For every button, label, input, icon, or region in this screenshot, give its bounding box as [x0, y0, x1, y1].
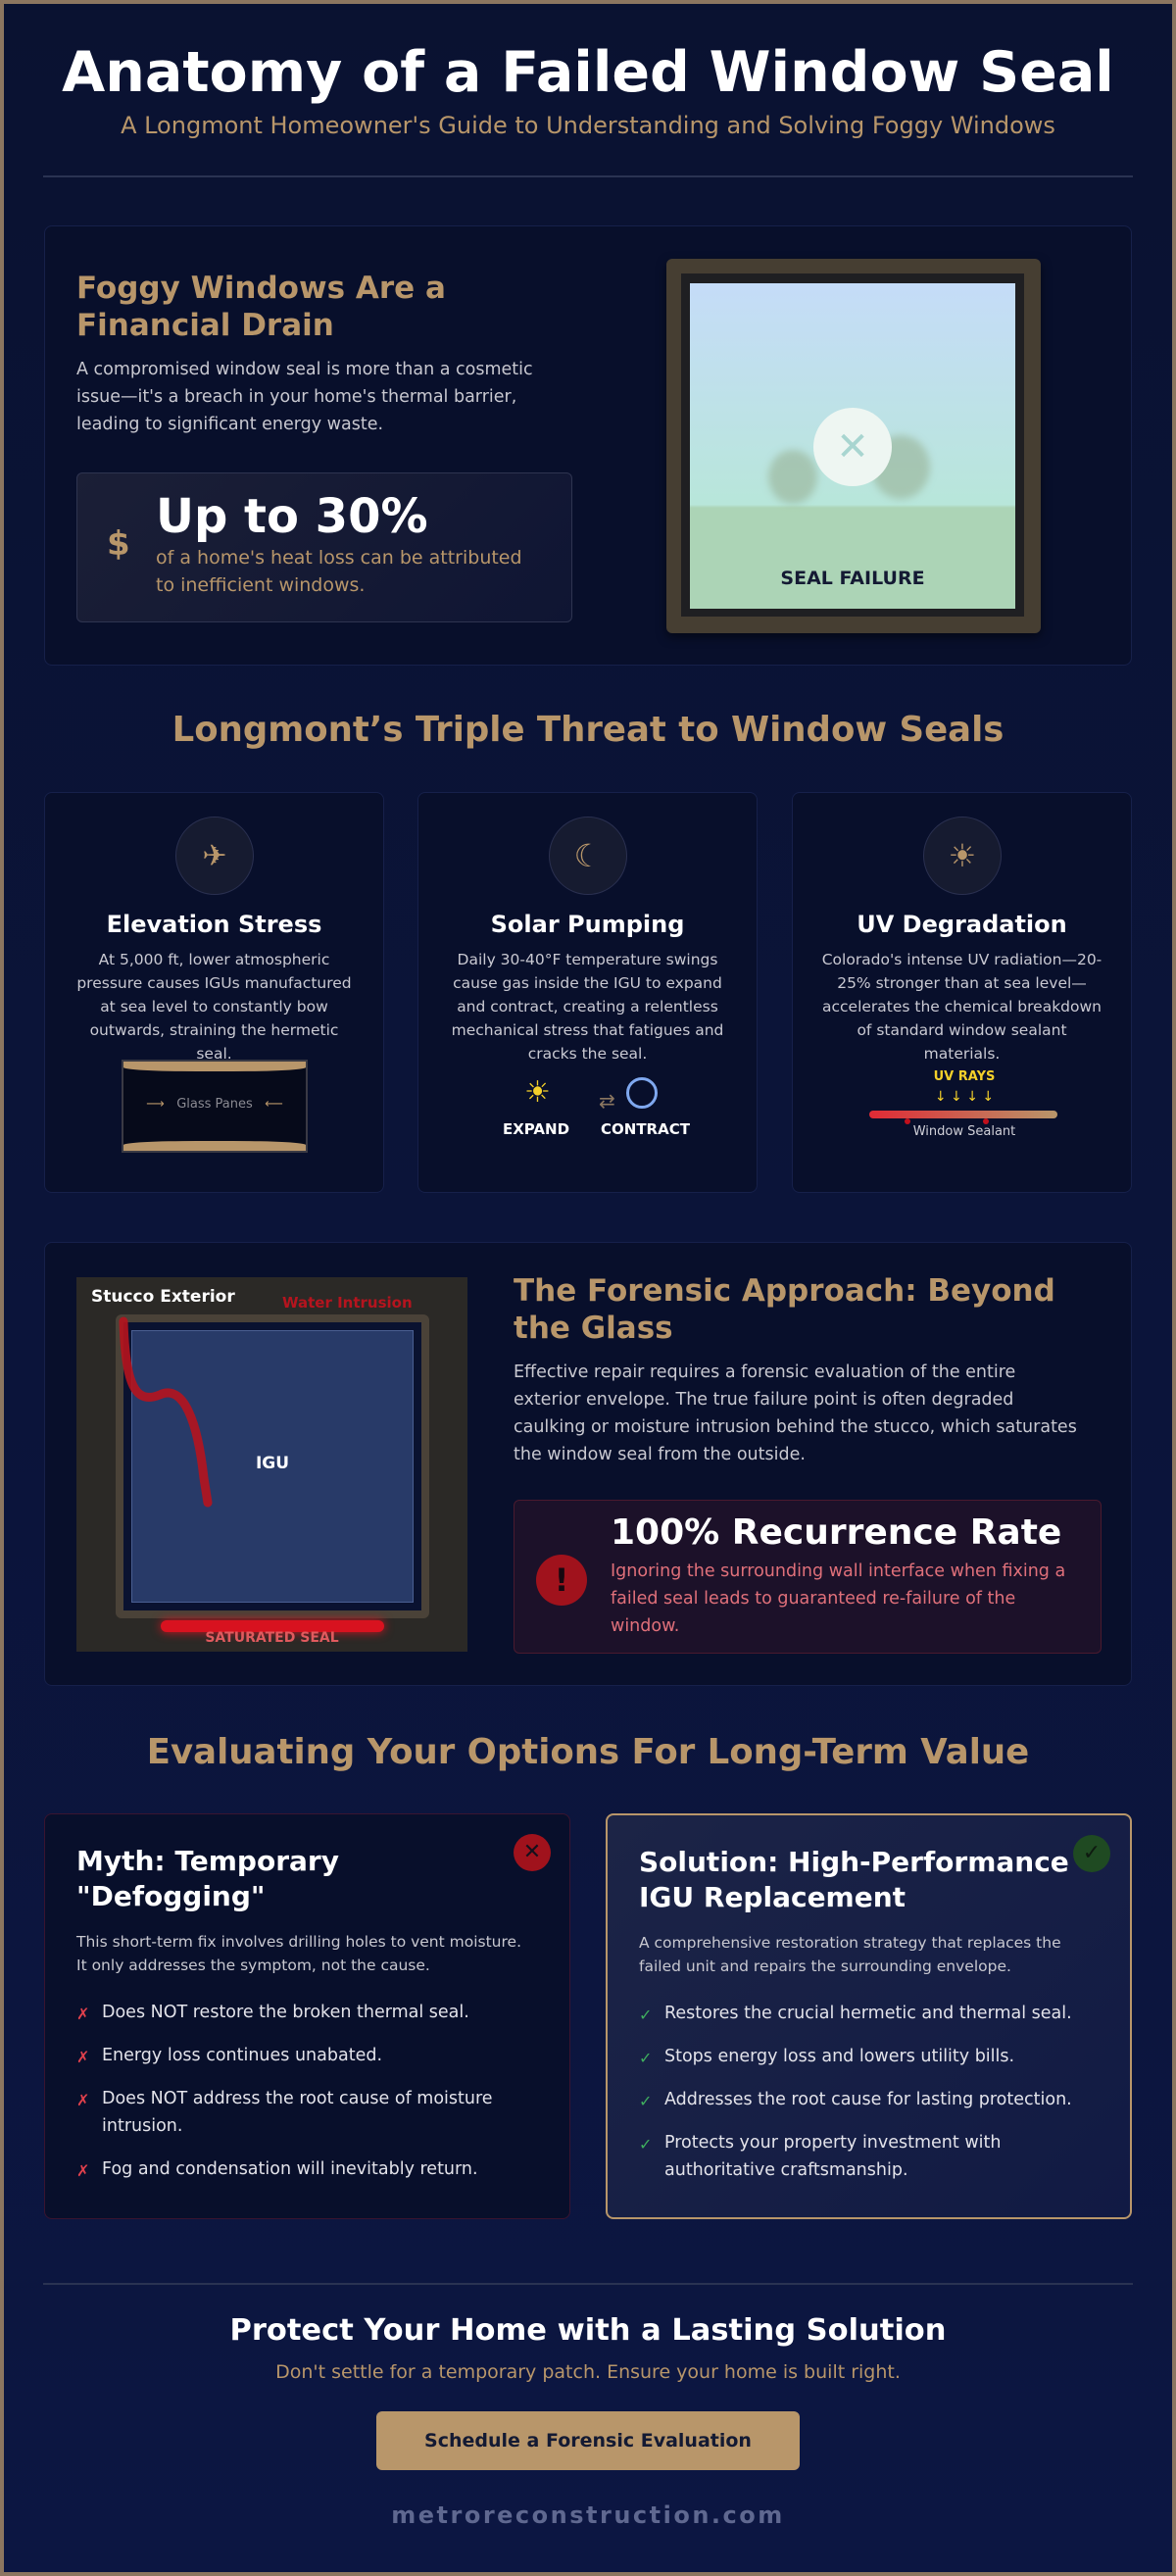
- list: solution points: [639, 2004, 1072, 2180]
- icon: red x: ✕: [523, 1840, 541, 1864]
- list: myth points: ✗: [76, 2161, 89, 2180]
- list: solution points: ✓: [639, 2006, 652, 2024]
- diagram: uv sealant: ↓ ↓ ↓ ↓: [935, 1089, 994, 1105]
- title: Anatomy of a Failed Window Seal: [62, 40, 1114, 105]
- icon: pumping: ☾: [574, 837, 602, 874]
- heading: myth: Myth: Temporary "Defogging": [76, 1845, 339, 1912]
- diagram: expand contract: ☀: [524, 1075, 551, 1110]
- heading: forensic approach: The Forensic Approach: Beyond the Glass: [514, 1273, 1055, 1346]
- text: myth intro: This short-term fix involves drilling holes to vent moisture.: [76, 1933, 521, 1951]
- text: recurrence: Ignoring the surrounding wall interface when fixing a: [611, 1561, 1065, 1581]
- icon: pumping: [549, 817, 627, 895]
- icon: green check: [1073, 1835, 1110, 1872]
- text: solution intro: failed unit and repairs the surrounding envelope.: [639, 1957, 1011, 1975]
- card: uv degradation: UV Degradation: [857, 911, 1067, 938]
- label: seal failure: SEAL FAILURE: [780, 568, 925, 589]
- text: forensic body: [514, 1362, 1077, 1464]
- card: solar pumping: Daily 30-40°F temperature swings cause gas inside the IGU to expand and contract, creating a relentless mechanical stress that fatigues and cracks the seal.: [452, 951, 723, 1063]
- diagram: expand contract: EXPAND: [503, 1120, 569, 1138]
- text: solution intro: A comprehensive restoration strategy that replaces the: [639, 1934, 1061, 1952]
- button: schedule: [376, 2411, 800, 2470]
- callout: recurrence rate: [514, 1500, 1102, 1654]
- subtitle: A Longmont Homeowner's Guide to Understanding and Solving Foggy Windows: [121, 112, 1055, 139]
- list: solution points: Protects your property investment with authoritative craftsmanship.: [664, 2133, 1001, 2180]
- icon: exclamation: [536, 1555, 587, 1606]
- icon: sun: [923, 817, 1002, 895]
- text: forensic body: Effective repair requires a forensic evaluation of the entire: [514, 1362, 1015, 1382]
- diagram: uv sealant: Window Sealant: [913, 1124, 1015, 1139]
- icon: x mark: ✕: [836, 424, 869, 470]
- card: uv degradation: Colorado's intense UV radiation—20-25% stronger than at sea level—accelerates the chemical breakdown of standard window sealant materials.: [822, 951, 1102, 1063]
- list: myth points: ✗: [76, 2091, 89, 2109]
- text: intro: A compromised window seal is more than a cosmetic issue—it's a breach in your home's thermal barrier, leading to significant energy waste.: [76, 360, 533, 434]
- label: stucco exterior: Stucco Exterior: [91, 1287, 235, 1307]
- heading: solution: [639, 1846, 1069, 1913]
- label: water intrusion: Water Intrusion: [282, 1294, 413, 1312]
- text: forensic body: the window seal from the outside.: [514, 1445, 806, 1464]
- text: solution intro: [639, 1934, 1061, 1975]
- diagram: stucco wall: [76, 1277, 467, 1652]
- stat caption: to inefficient windows.: [156, 574, 365, 596]
- panel: financial drain: [44, 225, 1132, 666]
- text: recurrence: window.: [611, 1616, 679, 1636]
- heading: evaluating options: Evaluating Your Options For Long-Term Value: [147, 1732, 1029, 1772]
- list: solution points: Restores the crucial hermetic and thermal seal.: [664, 2004, 1072, 2023]
- window illustration: [666, 259, 1041, 633]
- icon: elevation: [175, 817, 254, 895]
- list: myth points: [76, 2003, 493, 2180]
- panel: solution: [606, 1813, 1132, 2219]
- icon: x mark: [813, 408, 892, 486]
- label: saturated seal: SATURATED SEAL: [205, 1630, 339, 1646]
- list: myth points: ✗: [76, 2005, 89, 2023]
- list: solution points: Addresses the root cause for lasting protection.: [664, 2090, 1072, 2109]
- heading: solution: IGU Replacement: [639, 1881, 906, 1913]
- icon: water path: [120, 1317, 212, 1508]
- list: solution points: ✓: [639, 2135, 652, 2154]
- text: website: metroreconstruction.com: [391, 2502, 785, 2529]
- list: myth points: Fog and condensation will inevitably return.: [102, 2159, 478, 2179]
- heading: solution: Solution: High-Performance: [639, 1846, 1069, 1878]
- heading: triple threat: Longmont’s Triple Threat to Window Seals: [172, 710, 1004, 750]
- card: elevation stress: At 5,000 ft, lower atmospheric pressure causes IGUs manufactured at sea level to constantly bow outwards, straining the hermetic seal.: [76, 951, 352, 1063]
- icon: exclamation: !: [555, 1561, 568, 1599]
- list: myth points: ✗: [76, 2048, 89, 2066]
- text: myth intro: [76, 1933, 521, 1974]
- stat box: [76, 472, 572, 622]
- stat caption: [156, 547, 522, 596]
- icon: dollar: $: [107, 524, 130, 564]
- button: schedule: Schedule a Forensic Evaluation: [424, 2430, 752, 2452]
- list: myth points: Does NOT restore the broken thermal seal.: [102, 2003, 469, 2022]
- diagram: uv sealant: UV RAYS: [934, 1069, 995, 1084]
- diagram: glass panes: ⟶ Glass Panes ⟵: [146, 1097, 283, 1112]
- stat number: Up to 30%: [156, 489, 428, 544]
- icon: sun: ☀: [949, 837, 976, 874]
- text: forensic body: caulking or moisture intrusion behind the stucco, which saturates: [514, 1417, 1077, 1437]
- icon: elevation: ✈: [202, 839, 227, 872]
- diagram: expand contract: CONTRACT: [601, 1120, 690, 1138]
- panel: myth: [44, 1813, 570, 2219]
- heading: protect your home: Protect Your Home with a Lasting Solution: [229, 2313, 946, 2348]
- saturated seal bar: [161, 1620, 384, 1632]
- stat: 100%: 100% Recurrence Rate: [611, 1512, 1061, 1553]
- label: igu: IGU: [256, 1454, 289, 1473]
- panel: forensic approach: [44, 1242, 1132, 1686]
- icon: green check: ✓: [1083, 1841, 1101, 1865]
- list: solution points: Stops energy loss and lowers utility bills.: [664, 2047, 1014, 2066]
- diagram: expand contract: ⇄: [599, 1089, 615, 1113]
- text: recurrence: failed seal leads to guaranteed re-failure of the: [611, 1589, 1015, 1609]
- list: solution points: ✓: [639, 2092, 652, 2110]
- card: solar pumping: Solar Pumping: [491, 911, 684, 938]
- card: uv degradation: [792, 792, 1132, 1193]
- diagram: glass panes: [122, 1060, 308, 1153]
- list: solution points: ✓: [639, 2049, 652, 2067]
- text: myth intro: It only addresses the symptom, not the cause.: [76, 1957, 430, 1974]
- text: recurrence: [611, 1561, 1065, 1636]
- diagram: uv sealant: [869, 1069, 1057, 1139]
- list: myth points: Energy loss continues unabated.: [102, 2046, 382, 2065]
- text: cta subtitle: Don't settle for a temporary patch. Ensure your home is built right.: [275, 2361, 901, 2383]
- text: forensic body: exterior envelope. The true failure point is often degraded: [514, 1390, 1013, 1410]
- heading: foggy windows: Foggy Windows Are a Financial Drain: [76, 271, 446, 343]
- diagram: expand contract: [503, 1075, 690, 1138]
- list: myth points: Does NOT address the root cause of moisture intrusion.: [102, 2089, 493, 2136]
- card: elevation stress: [44, 792, 384, 1193]
- card: elevation stress: Elevation Stress: [107, 911, 321, 938]
- icon: red x: [514, 1834, 551, 1871]
- stat caption: of a home's heat loss can be attributed: [156, 547, 522, 569]
- card: solar pumping: [417, 792, 758, 1193]
